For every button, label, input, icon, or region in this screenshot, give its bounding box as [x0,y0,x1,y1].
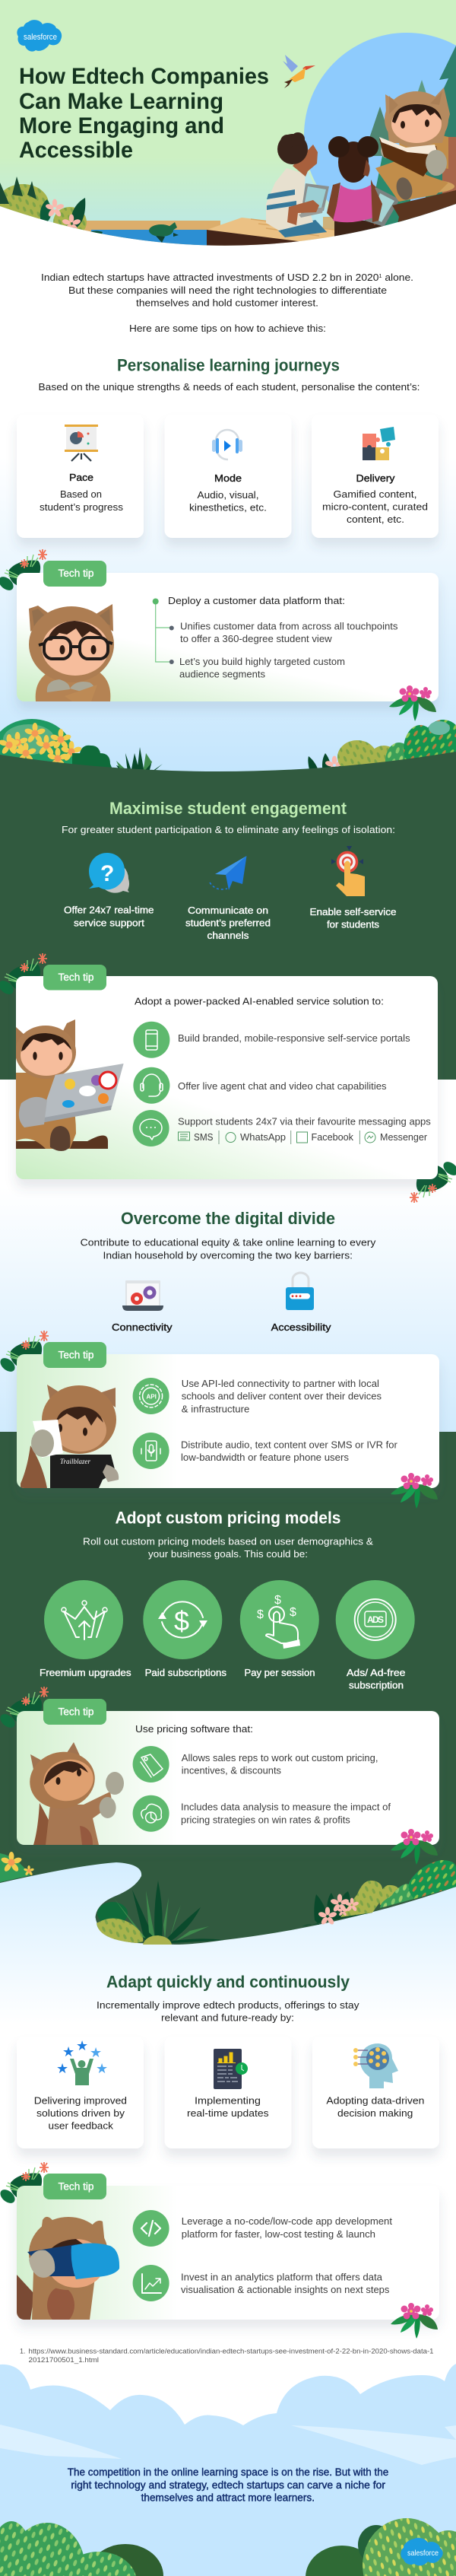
icon: phone mic [133,1433,169,1469]
pricing text: Allows sales reps to work out custom pricing, [182,1752,378,1763]
card: real-time updates [164,2037,292,2148]
label: Communicate on [188,905,268,916]
pace text: Based on [60,488,102,500]
subheading: adapt: Incrementally improve edtech products, offerings to stay [97,1999,359,2011]
item: self-service [310,846,397,930]
bullet: low-code [133,2210,392,2247]
audio text: Distribute audio, text content over SMS or IVR for [181,1439,397,1450]
icon: touch target [331,846,365,896]
subheading: adapt: relevant and future-ready by: [161,2012,294,2024]
messaging apps row [178,1131,428,1144]
icon: hand with dollars: $ [274,1594,281,1607]
icon: laptop gears [122,1280,163,1311]
tag [43,561,106,587]
analysis text: pricing strategies on win rates & profits [181,1814,350,1825]
low-code text: Leverage a no-code/low-code app development [182,2215,392,2227]
delivery text: Gamified content, [333,488,416,500]
pricing text: incentives, & discounts [182,1765,281,1776]
footnote: 1. [20,2348,26,2355]
bottom-right bushes [306,2518,456,2576]
item: accessibility: Accessibility [271,1321,331,1333]
tech tip panel 4 [0,1687,439,1865]
bullet: audio [133,1433,397,1469]
audio text [181,1439,397,1463]
salesforce logo [401,2538,443,2565]
footnote: 20121700501_1.html [29,2356,99,2364]
dock [207,218,336,246]
icon: headset [212,430,242,460]
tag [43,1342,106,1368]
icon: code brackets [133,2210,169,2247]
tech tip panel 2 [0,953,456,1203]
intro text: themselves and hold customer interest. [136,297,318,309]
card: data-driven [312,2037,439,2148]
tech tip panel 5 [0,2162,439,2339]
label: Offer 24x7 real-time [64,905,154,916]
icon: dollar cycle: $ [174,1605,189,1636]
icon: chat bubble [133,1110,169,1146]
turtle [149,222,179,243]
foliage at the bottom of pricing section [0,1852,456,1945]
subheading: digital divide: Contribute to educational equity & take online learning to every [81,1237,376,1248]
mascot in black hoodie: Trailblazer [60,1458,90,1465]
center: agave and olive bush [97,1881,224,1945]
card text [326,2094,424,2119]
api text [182,1378,382,1414]
icon: person with stars: ★ [76,2038,88,2054]
label [347,1667,406,1691]
left plants [0,177,103,234]
salesforce logo: salesforce [407,2549,439,2558]
subheading: adapt [97,1999,359,2024]
salesforce logo [17,20,62,52]
salesforce logo: salesforce [24,33,57,42]
pace text [40,488,124,513]
mascot with glasses [29,604,114,701]
icon: person with stars [56,2038,108,2085]
icon: headset [133,1067,169,1104]
foliage [0,953,47,997]
heading: adapt: Adapt quickly and continuously [106,1973,350,1992]
analytics text: Invest in an analytics platform that offers data [181,2272,383,2283]
delivery label: Delivery [356,472,395,484]
low-code text: platform for faster, low-cost testing & launch [182,2228,375,2240]
model: freemium: Freemium upgrades [40,1667,131,1678]
boy [266,132,329,237]
card text: Adopting data-driven [326,2094,424,2106]
mascot waving [24,1742,124,1845]
subheading: personalise: Based on the unique strengths & needs of each student, personalise the content’s: [38,381,420,393]
delivery text: micro-content, curated [322,501,428,513]
icon: person with stars: ★ [90,2045,102,2061]
closing statement: themselves and attract more learners. [141,2492,315,2504]
delivery text [322,488,428,525]
title [19,64,269,163]
sand and water [76,221,220,246]
messaging apps row: Messenger [380,1131,428,1143]
tag: Tech tip [58,568,94,579]
intro text: 1 [378,274,382,279]
left: flower bush [0,1852,34,1882]
item: accessibility [271,1273,331,1333]
label [185,905,271,941]
label: student’s preferred [185,918,271,928]
mascot in black hoodie [21,1385,119,1488]
tip text [168,595,398,680]
model: subscriptions: Paid subscriptions [145,1667,227,1678]
title: Accessible [19,138,133,163]
dark section: pricing [0,1432,456,1945]
mascot with vr headset [17,2217,119,2323]
bullet: api [133,1378,382,1414]
hero illustration [0,0,456,262]
hummingbird [283,55,315,88]
intro text: But these companies will need the right technologies to differentiate [68,285,387,296]
card text [187,2094,269,2119]
analytics text: visualisation & actionable insights on next steps [181,2284,390,2295]
tag: Tech tip [58,972,94,983]
title: Can Make Learning [19,89,223,114]
analysis text: Includes data analysis to measure the impact of [181,1802,391,1813]
subheading: pricing: your business goals. This could be: [148,1548,308,1560]
icon: line chart [133,2265,169,2301]
pink flower [391,1829,438,1865]
icon: puzzle [363,427,395,460]
model: per session [240,1580,319,1678]
closing statement: right technology and strategy, edtech startups can carve a niche for [71,2479,385,2491]
icon: cloud chart [133,1795,169,1832]
label: subscription [349,1680,404,1691]
closing sky with clouds [0,2364,456,2576]
pace text: student’s progress [40,501,124,513]
dark section: engagement [0,752,456,1080]
pink flower [391,2303,438,2339]
bullet: messaging: Support students 24x7 via their favourite messaging apps [178,1116,431,1127]
intro text: alone. [382,272,413,283]
model: subscriptions [143,1580,227,1678]
tag: Tech tip [58,1350,94,1360]
icon: person with stars: ★ [62,2044,74,2060]
icon: ads circle [336,1580,415,1659]
card text: solutions driven by [36,2107,125,2119]
tip text: Unifies customer data from across all touchpoints [180,621,398,632]
pink flower [391,1473,438,1509]
bullet: live chat [133,1067,387,1104]
audio text: low-bandwidth or feature phone users [181,1452,349,1463]
icon: question bubble: ? [100,861,114,886]
icon: person with stars: ★ [96,2061,108,2077]
icon: tablet with clock [214,2049,248,2089]
bullet: custom pricing [133,1746,378,1783]
card text: Implementing [195,2094,261,2106]
mode text: kinesthetics, etc. [189,502,267,513]
bullet: live chat: Offer live agent chat and video chat capabilities [178,1080,387,1092]
bullet: data analysis [133,1795,391,1832]
foliage [0,2162,49,2206]
api text: schools and deliver content over their devices [182,1391,382,1402]
subheading: digital divide: Indian household by overcoming the two key barriers: [103,1250,353,1261]
foliage [0,1331,49,1374]
card: pace [17,415,144,538]
model: freemium [40,1580,131,1678]
api text: & infrastructure [182,1403,249,1414]
trees [363,46,456,228]
mode text: Audio, visual, [198,489,258,501]
icon: crown [44,1580,123,1659]
foliage strip above engagement section [0,719,456,795]
intro text: Here are some tips on how to achieve this: [129,323,326,334]
girl [327,136,398,236]
tip text: audience segments [179,669,265,680]
bottom-left bushes [0,2521,163,2576]
messaging apps row: WhatsApp [240,1131,286,1143]
bullet: messaging [133,1110,431,1146]
pink flower [389,685,436,721]
card: mode [164,415,292,538]
icon: paper plane [210,856,246,890]
card: user feedback [17,2037,144,2148]
item: connectivity [112,1280,173,1333]
pace label: Pace [69,472,93,483]
bullet: analytics [133,2265,390,2301]
icon: price tag [133,1746,169,1783]
heading: personalise: Personalise learning journeys [117,356,340,374]
bullet: portals: Build branded, mobile-responsive self-service portals [178,1032,410,1044]
mode text [189,489,267,513]
card text: Delivering improved [34,2094,127,2106]
subheading: digital divide [81,1237,376,1261]
tag [43,1699,106,1725]
item: connectivity: Connectivity [112,1321,173,1333]
tag [43,965,106,991]
closing statement: The competition in the online learning space is on the rise. But with the [68,2466,388,2478]
heading: pricing: Adopt custom pricing models [116,1509,340,1528]
low-code text [182,2215,392,2240]
foliage [0,1687,49,1730]
messaging apps row: Facebook [312,1131,353,1143]
subheading: engagement: For greater student participation & to eliminate any feelings of isolation: [62,824,395,835]
icon: hand with dollars [240,1580,319,1659]
tag [43,2174,106,2199]
icon: hand with dollars: $ [290,1606,296,1619]
right: flowers and shrubs [302,1860,456,1926]
messaging apps row: SMS [194,1131,214,1143]
label [310,906,397,930]
label: Enable self-service [310,906,397,918]
tech tip panel 1 [0,549,439,721]
card text [34,2094,127,2132]
title: More Engaging and [19,113,224,138]
model: ads [336,1580,415,1691]
tip heading: Adopt a power-packed AI-enabled service solution to: [135,996,384,1007]
label [64,905,154,928]
label: service support [74,917,144,928]
icon: presentation board [65,425,98,461]
model: per session: Pay per session [245,1667,315,1678]
tip text: Deploy a customer data platform that: [168,595,345,606]
tip text: to offer a 360-degree student view [180,633,332,644]
analytics text [181,2272,390,2295]
card: delivery [312,415,439,538]
icon: lock [286,1273,314,1310]
mascot with laptop [15,1019,124,1151]
card text: decision making [337,2107,413,2119]
footnote: https://www.business-standard.com/article/education/indian-edtech-startups-see-investment-of-2-22-bn-in-2020-shows-data-1 [29,2348,433,2355]
mode label: Mode [214,472,242,484]
astro reading on a stump [375,87,456,222]
api text: Use API-led connectivity to partner with local [182,1378,379,1389]
intro text: Indian edtech startups have attracted investments of USD 2.2 bn in 2020 [41,272,359,283]
delivery text: content, etc. [347,514,404,525]
heading: digital divide: Overcome the digital divide [121,1209,335,1228]
closing statement [68,2466,388,2504]
pricing text [182,1752,378,1776]
subheading: pricing [83,1536,373,1560]
tag: Tech tip [58,2180,94,2193]
icon: head with network [353,2043,398,2088]
bullet: portals [133,1022,410,1058]
footnote [20,2348,433,2364]
label: channels [207,930,249,941]
icon: hand with dollars: $ [257,1608,264,1621]
subheading: pricing: Roll out custom pricing models based on user demographics & [83,1536,373,1547]
foliage [0,549,47,593]
analysis text [181,1802,391,1825]
item: real-time support [64,853,154,928]
label: Ads/ Ad-free [347,1667,406,1678]
tech tip panel 3 [0,1331,439,1509]
icon: ads circle: ADS [367,1614,384,1625]
card text: real-time updates [187,2107,269,2119]
timeline [153,598,174,664]
intro text [41,272,413,334]
tag: Tech tip [58,1706,94,1718]
label: for students [327,919,379,930]
heading: engagement: Maximise student engagement [109,799,347,818]
card text: user feedback [49,2120,114,2132]
tip heading: Use pricing software that: [135,1723,253,1735]
icon: person with stars: ★ [56,2061,68,2077]
icon: phone [133,1022,169,1058]
tip text: Let’s you build highly targeted custom [179,656,345,667]
item: preferred channels [185,856,271,941]
title: How Edtech Companies [19,64,269,89]
icon: api gear [133,1378,169,1414]
icon: api gear: API [146,1394,157,1400]
